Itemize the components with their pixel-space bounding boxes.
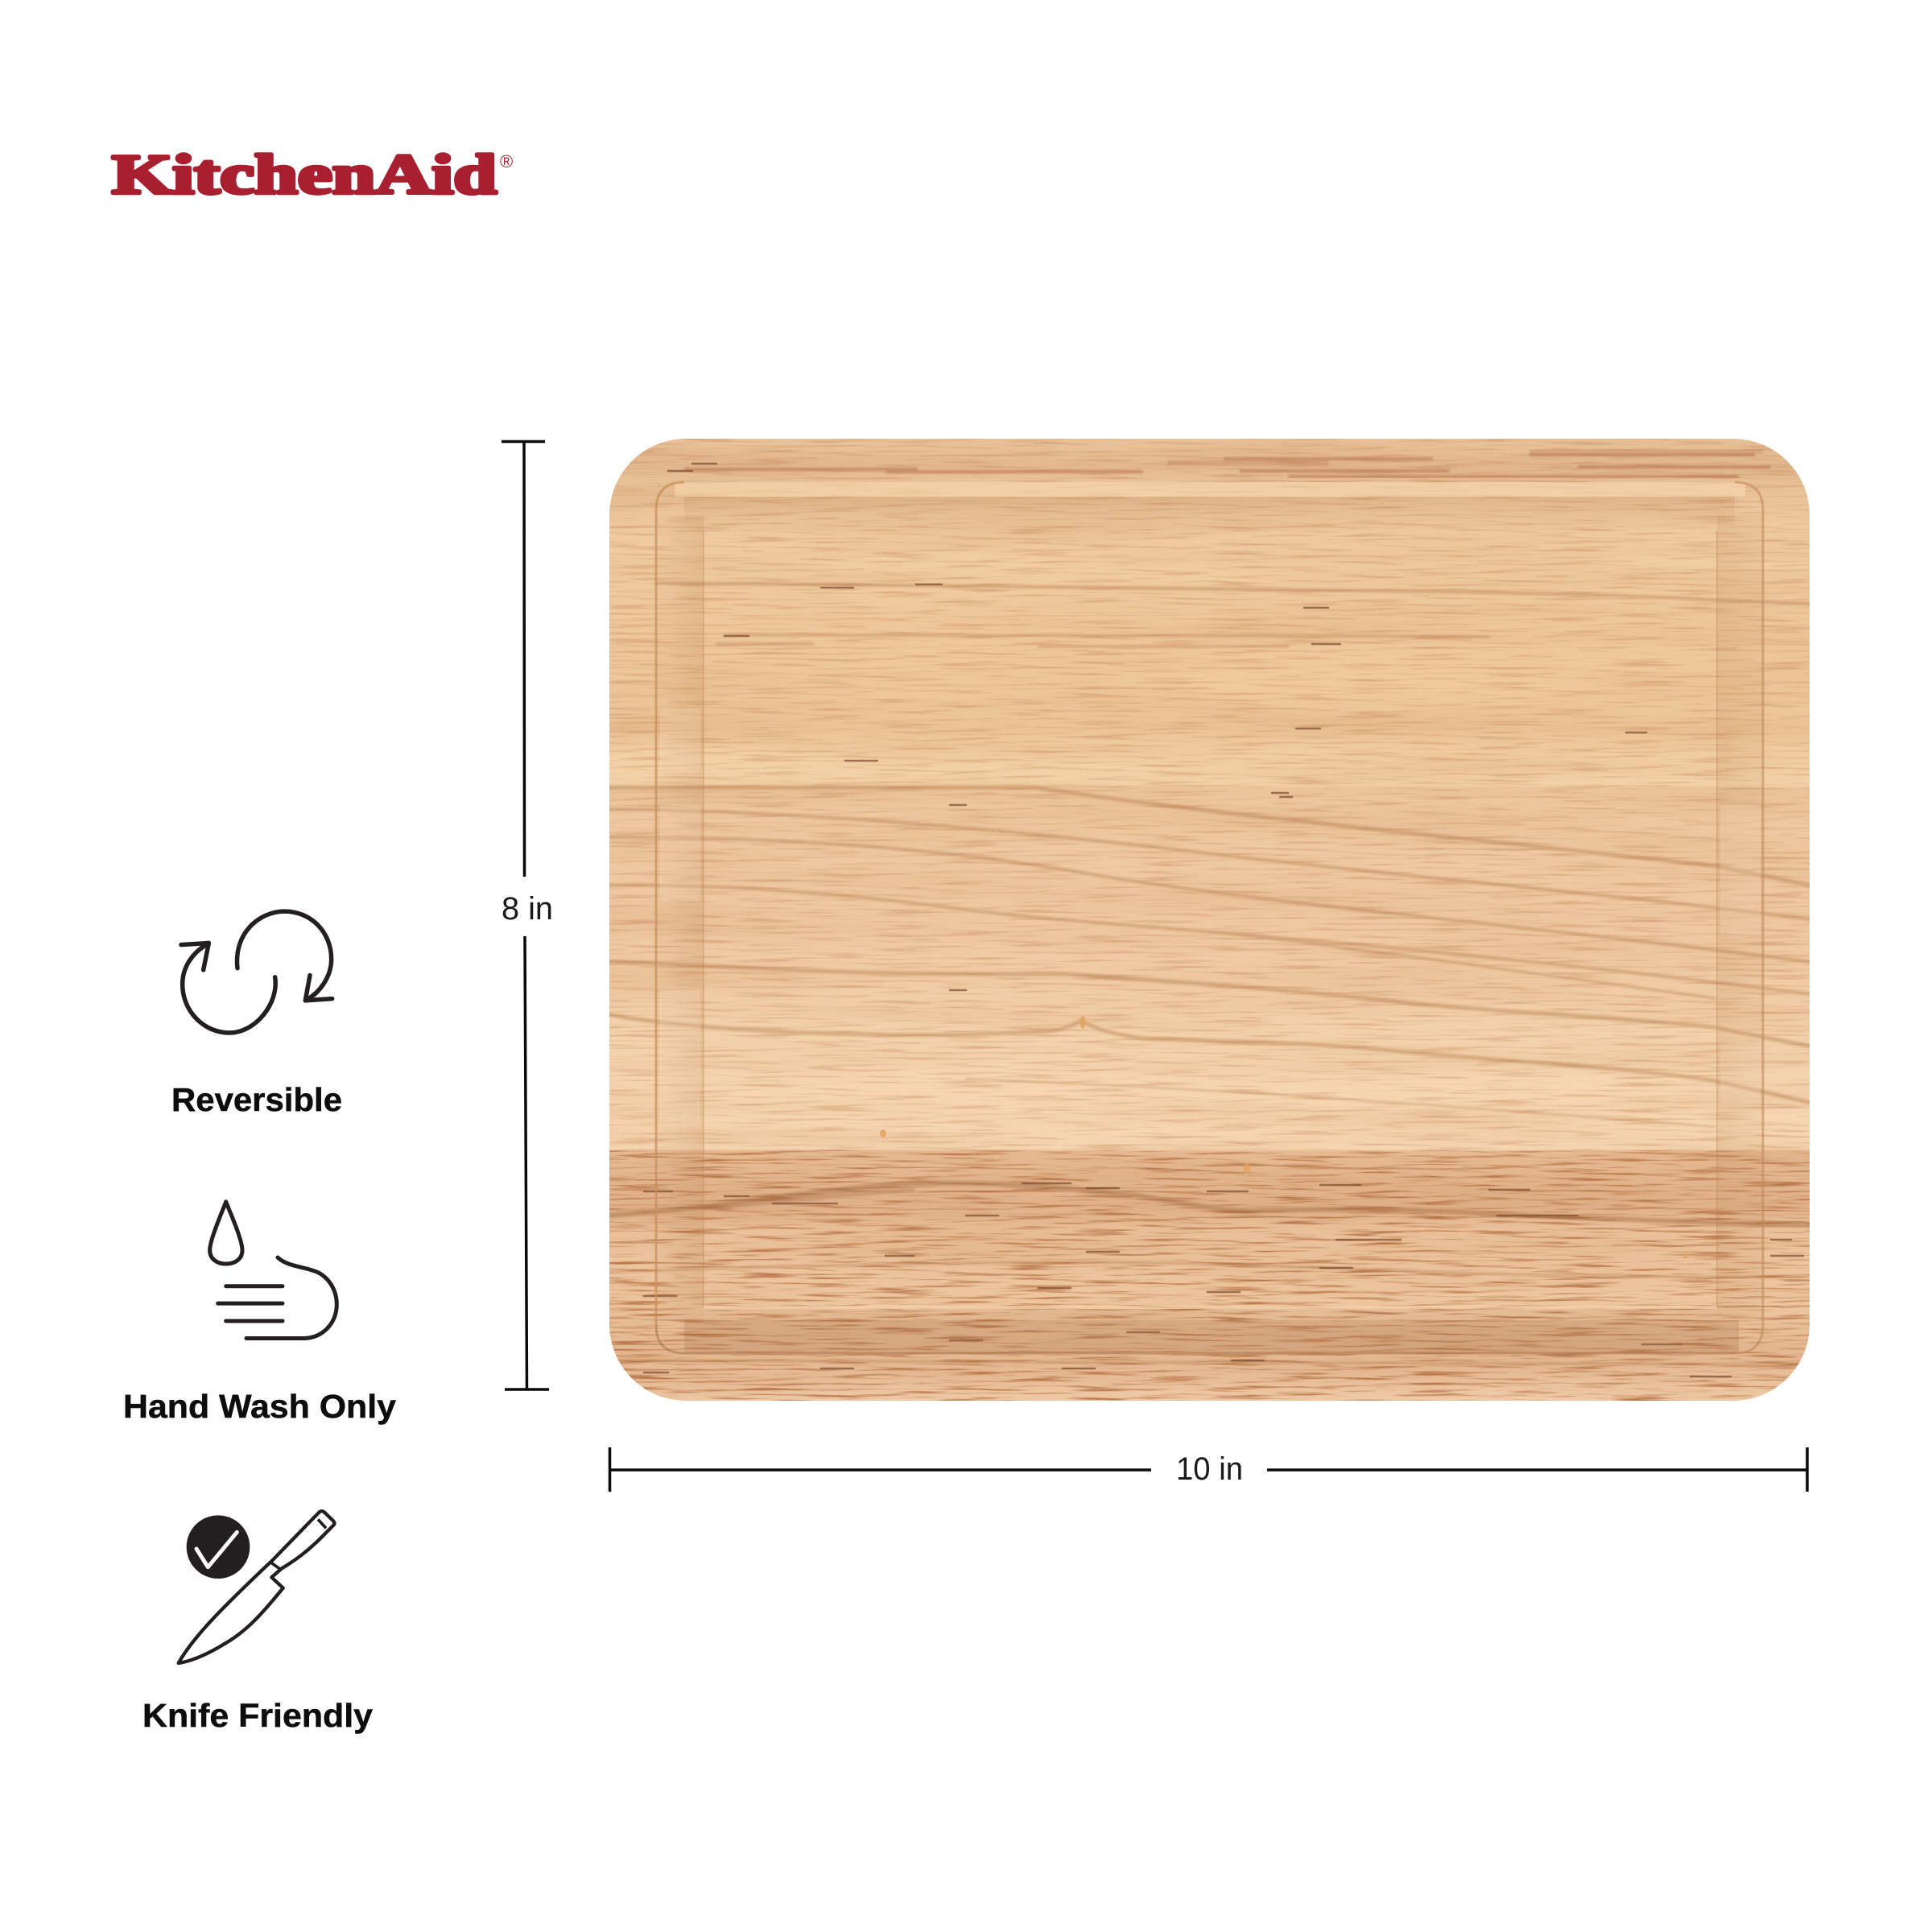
wood grain lines bbox=[609, 583, 1811, 1364]
logo: KitchenAid: KitchenAid bbox=[112, 144, 497, 206]
dark grain ticks bbox=[644, 464, 1803, 1377]
label: Knife Friendly: Knife Friendly bbox=[142, 1697, 373, 1734]
icon: knife with check bbox=[179, 1511, 334, 1663]
horizontal dimension: 10 in bbox=[609, 1447, 1807, 1492]
logo: KitchenAid: ® bbox=[500, 151, 513, 171]
vertical dimension: 8 in bbox=[502, 441, 553, 1389]
logo: KitchenAid bbox=[112, 144, 513, 206]
horizontal dimension: 10 in: 10 in bbox=[1176, 1451, 1243, 1487]
icon: hand wash bbox=[210, 1202, 336, 1338]
top strip reddish mottling bbox=[684, 451, 1771, 477]
vertical dimension: 8 in: 8 in bbox=[502, 891, 553, 927]
cutting board photo bbox=[609, 439, 1811, 1401]
juice groove bbox=[656, 482, 1763, 1353]
label: Hand Wash Only: Hand Wash Only bbox=[123, 1388, 396, 1425]
label: Reversible: Reversible bbox=[171, 1081, 342, 1118]
small knots bbox=[880, 1016, 1688, 1258]
icon: reversible arrows bbox=[181, 911, 332, 1033]
